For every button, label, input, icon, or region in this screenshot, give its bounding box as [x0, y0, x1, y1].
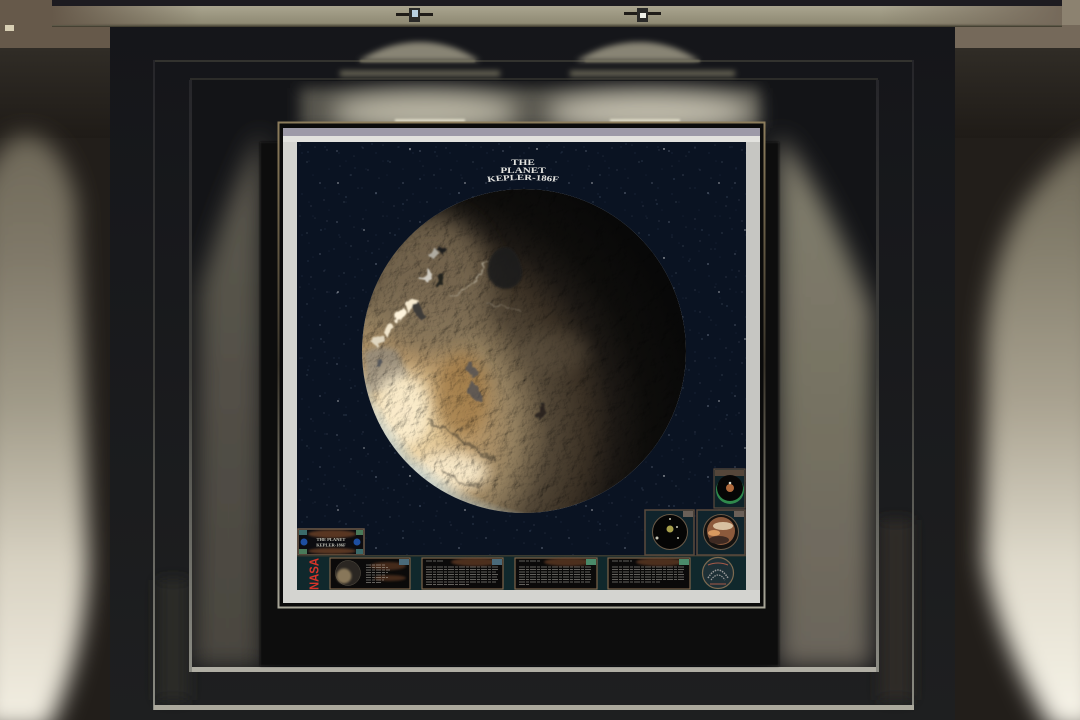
artwork: starfield	[297, 142, 746, 590]
ceiling cornice	[0, 0, 1080, 48]
title: THE	[511, 158, 535, 167]
bright cloud glow	[374, 374, 430, 446]
white mat	[283, 128, 760, 603]
title: PLANET	[500, 166, 546, 175]
grey lakes	[465, 361, 547, 421]
right wall with spotlight	[955, 48, 1080, 720]
orbit diagram panel	[645, 510, 694, 555]
faint haze at centre	[529, 330, 590, 372]
tan upper-left land	[370, 215, 490, 355]
info strip	[297, 555, 746, 590]
NASA worm logo: NASA	[306, 557, 322, 590]
round mission badge	[702, 558, 734, 588]
left wall with spotlight	[0, 48, 110, 720]
grey water on the left limb	[364, 347, 408, 394]
small title plaque	[298, 529, 364, 555]
inner lit panel	[189, 78, 879, 672]
info panel 3	[515, 558, 597, 589]
small title plaque: THE PLANET	[317, 537, 345, 542]
framed poster	[278, 122, 766, 608]
outer frame	[278, 122, 764, 608]
icon: ceiling spot lamp left	[396, 8, 433, 22]
spotlight pools above the frame	[340, 42, 735, 122]
sunset view panel	[697, 510, 745, 555]
dark wall panel	[110, 27, 955, 720]
terrain relief	[362, 189, 686, 513]
info panel 4	[608, 558, 690, 589]
system emblem panel	[714, 469, 745, 508]
title: KEPLER-186F	[487, 174, 559, 182]
white ridge clouds	[372, 247, 520, 369]
outer moulding	[153, 60, 914, 711]
golden desert	[436, 353, 488, 437]
cloud streaks in the south	[425, 420, 495, 488]
dark crater lake	[488, 247, 522, 289]
planet Kepler-186f	[362, 189, 686, 513]
info panel 1 with planet thumbnail	[330, 558, 410, 589]
small title plaque: KEPLER-186F	[316, 542, 346, 548]
icon: ceiling spot lamp right	[624, 8, 661, 22]
framed poster shadow	[260, 142, 779, 666]
title	[487, 158, 559, 182]
info panel 2	[422, 558, 503, 589]
